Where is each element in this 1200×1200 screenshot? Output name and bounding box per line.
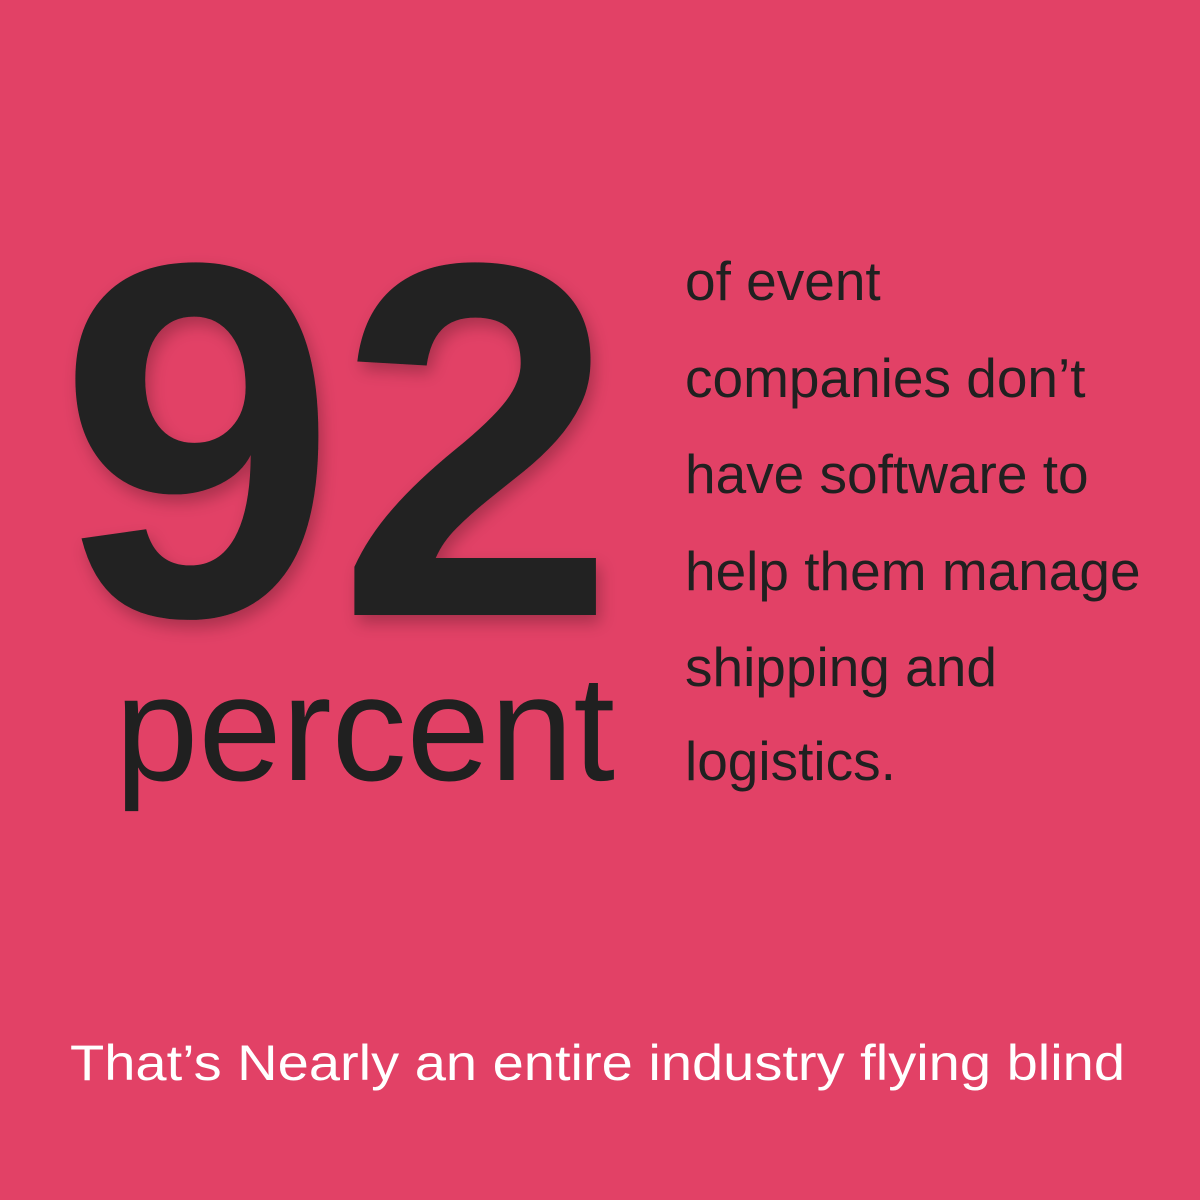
description text block: help them manage	[685, 540, 1141, 602]
handwritten word: percent: percent	[115, 644, 615, 812]
description text block	[685, 250, 1141, 792]
description text block: companies don’t	[685, 347, 1086, 409]
big number 92: 92	[58, 159, 616, 723]
description text block: shipping and	[685, 636, 997, 698]
description text block: of event	[685, 250, 881, 312]
tagline: That’s Nearly an entire industry flying blind	[70, 1035, 1125, 1091]
description text block: have software to	[685, 443, 1089, 505]
description text block: logistics.	[685, 730, 896, 792]
